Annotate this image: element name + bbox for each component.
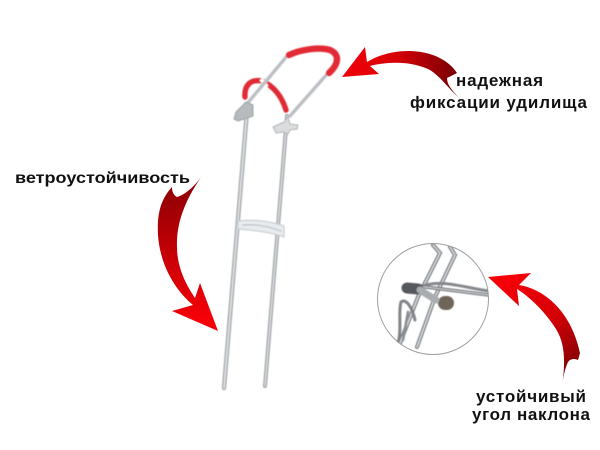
right rod: [265, 116, 287, 386]
left rod: [224, 105, 248, 388]
clamp ring: [238, 220, 284, 237]
arrow: bottom right: [488, 273, 580, 387]
arrow: left: [158, 173, 218, 331]
product: rod holder: [224, 49, 337, 388]
back arch, red grip: [245, 81, 286, 110]
label line 1: устойчивый: [476, 387, 586, 406]
label line 2: фиксации удилища: [410, 93, 588, 112]
label: stable angle: [472, 387, 591, 424]
inset: metal detail: [398, 245, 489, 347]
front arch, metal: [236, 56, 328, 117]
label line 2: угол наклона: [472, 405, 591, 424]
front arch, red grip: [289, 49, 337, 73]
right bracket: [273, 117, 298, 134]
label: wind resistance: ветроустойчивость: [15, 170, 190, 187]
label: reliable fixation: [410, 71, 588, 112]
detail inset circle: [378, 244, 489, 354]
left bracket: [234, 102, 253, 121]
arrow: top right: [342, 47, 458, 97]
white highlight on the back arch: [261, 79, 267, 87]
label line 1: надежная: [456, 71, 543, 90]
